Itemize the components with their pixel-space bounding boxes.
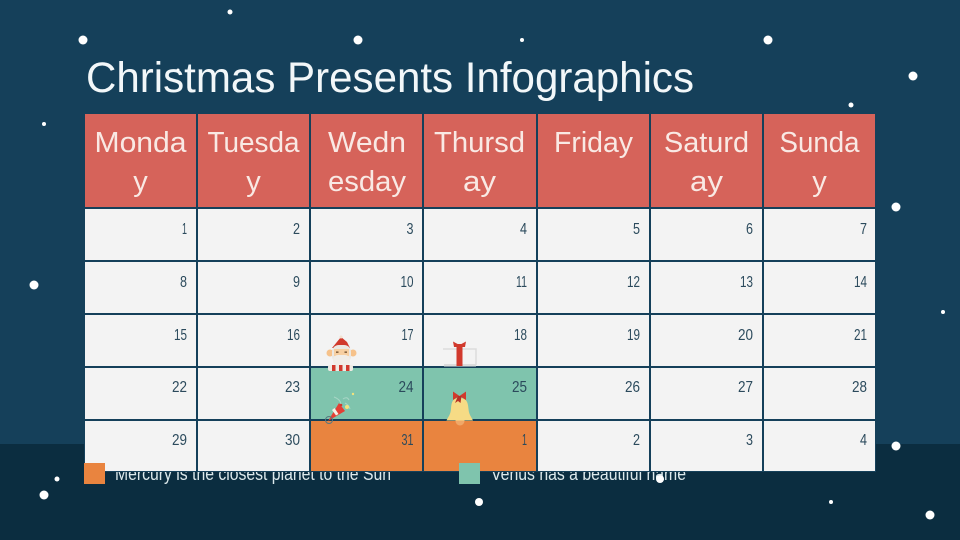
- date numbers: [172, 221, 867, 449]
- date numbers: 2: [293, 221, 300, 238]
- icon: santa: [326, 336, 356, 371]
- date numbers: 6: [746, 221, 753, 238]
- date numbers: 13: [740, 274, 753, 291]
- header labels: esday: [328, 166, 406, 198]
- date numbers: 1: [522, 432, 527, 449]
- icon: bell: [446, 392, 473, 426]
- date numbers: 8: [180, 274, 187, 291]
- date numbers: 15: [174, 327, 187, 344]
- date cells: [85, 209, 875, 471]
- date numbers: 4: [520, 221, 527, 238]
- legend text: Mercury: Mercury is the closest planet to the Sun: [115, 464, 391, 484]
- header labels: [94, 127, 860, 198]
- date numbers: 16: [287, 327, 300, 344]
- icon: party popper: [326, 393, 354, 424]
- date numbers: 30: [285, 432, 300, 449]
- date numbers: 3: [746, 432, 753, 449]
- date numbers: 29: [172, 432, 187, 449]
- date numbers: 28: [852, 379, 867, 396]
- date numbers: 3: [406, 221, 414, 238]
- date numbers: 11: [516, 274, 527, 291]
- header labels: Tuesda: [208, 127, 300, 159]
- header row: [85, 114, 875, 207]
- title: Christmas Presents Infographics: [86, 54, 694, 102]
- snow dot over legend: [656, 475, 664, 483]
- date numbers: 24: [398, 379, 414, 396]
- date numbers: 27: [738, 379, 753, 396]
- header labels: ay: [463, 166, 497, 198]
- date numbers: 18: [514, 327, 527, 344]
- date numbers: 7: [860, 221, 867, 238]
- icon: gift: [443, 342, 476, 366]
- highlighted cells: 31 and 1: [311, 421, 536, 471]
- header labels: y: [246, 166, 261, 198]
- legend swatch: green: [459, 463, 480, 484]
- date numbers: 23: [285, 379, 300, 396]
- date numbers: 14: [854, 274, 867, 291]
- date numbers: 4: [860, 432, 867, 449]
- date numbers: 2: [633, 432, 640, 449]
- date numbers: 5: [633, 221, 640, 238]
- date numbers: 31: [402, 432, 414, 449]
- table backing: [84, 113, 876, 472]
- header labels: ay: [690, 166, 724, 198]
- date numbers: 22: [172, 379, 187, 396]
- legend swatch: orange: [84, 463, 105, 484]
- header labels: Sunda: [780, 127, 860, 159]
- date numbers: 9: [293, 274, 300, 291]
- date numbers: 25: [512, 379, 527, 396]
- date numbers: 19: [627, 327, 640, 344]
- header labels: Monda: [94, 127, 187, 159]
- calendar table: [84, 113, 876, 472]
- highlighted cells: 24 and 25: [311, 368, 536, 419]
- header labels: Friday: [554, 127, 633, 159]
- snow dot over title: [176, 68, 180, 72]
- header labels: y: [133, 166, 148, 198]
- date numbers: 21: [854, 327, 867, 344]
- header labels: Saturd: [664, 127, 749, 159]
- header labels: Wedn: [328, 127, 406, 159]
- legend text: Venus: Venus has a beautiful name: [491, 464, 686, 484]
- date numbers: 12: [627, 274, 640, 291]
- date numbers: 17: [402, 327, 414, 344]
- header labels: Thursd: [434, 127, 525, 159]
- date numbers: 20: [738, 327, 753, 344]
- date numbers: 26: [625, 379, 640, 396]
- date numbers: 1: [182, 221, 187, 238]
- header labels: y: [812, 166, 827, 198]
- date numbers: 10: [400, 274, 414, 291]
